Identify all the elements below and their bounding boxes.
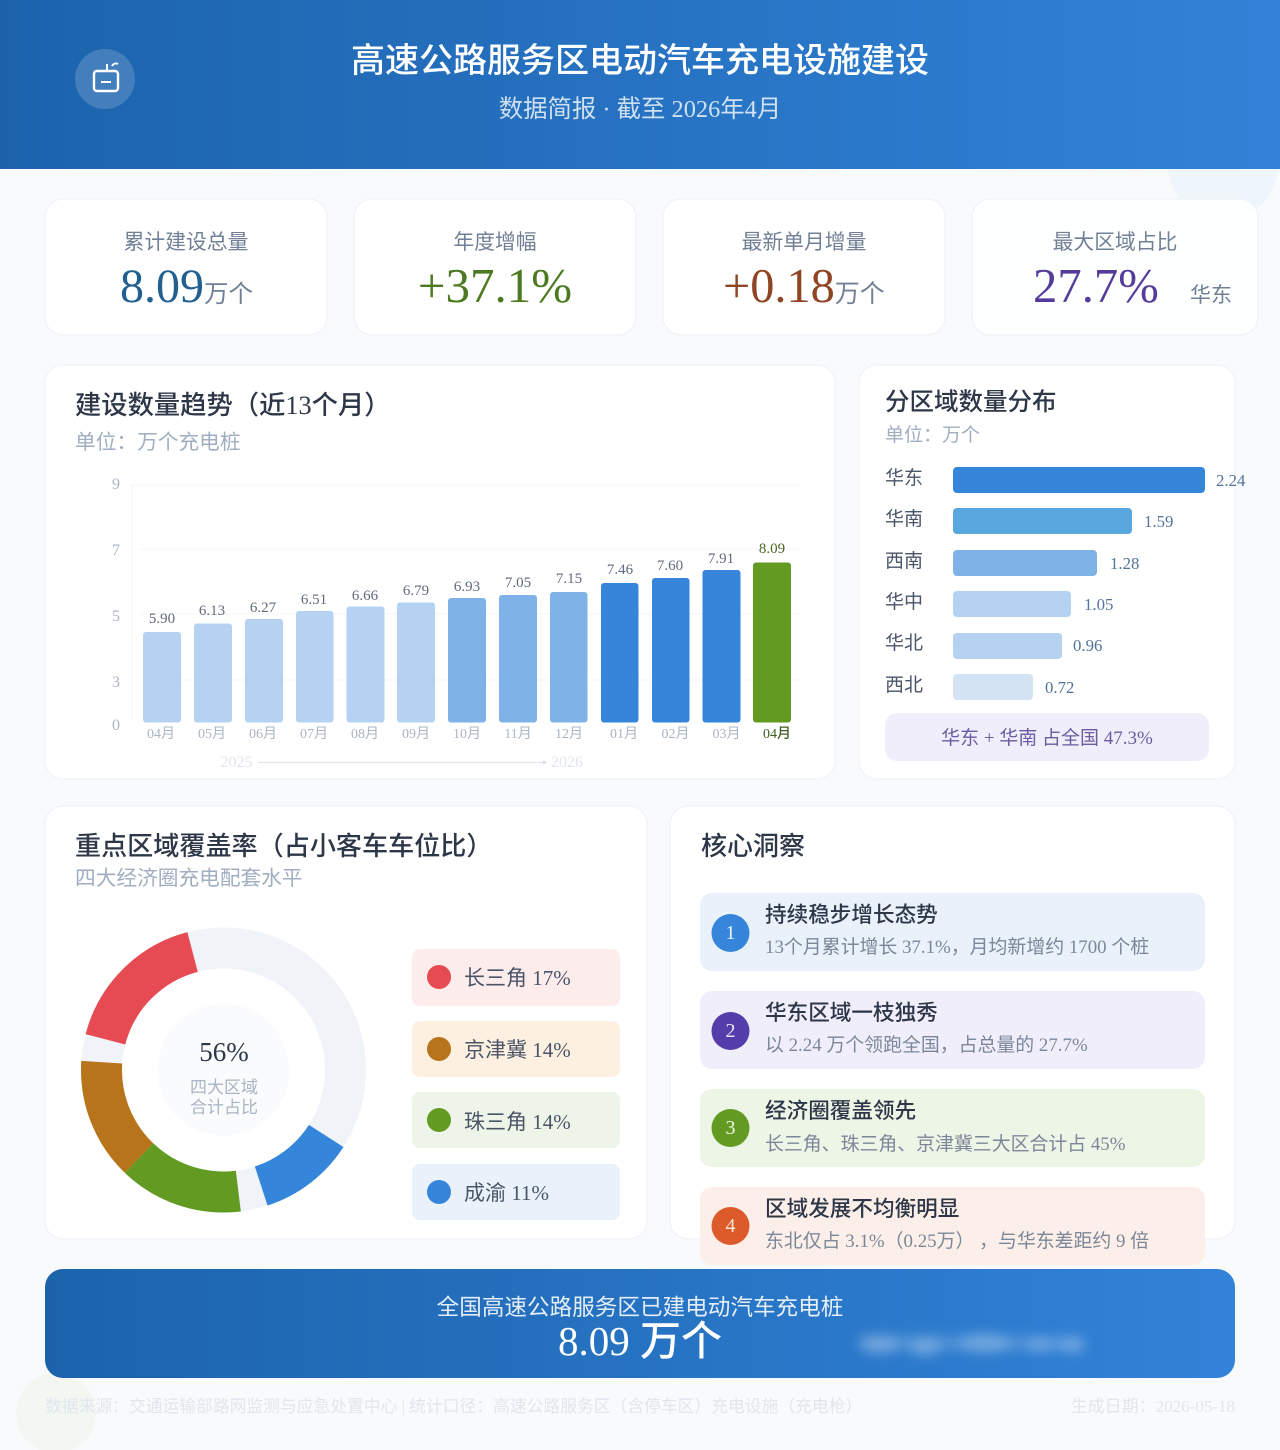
bar chart: 03月 [712, 726, 740, 742]
footer date: 生成日期：2026-05-18 [1071, 1397, 1235, 1416]
panel: construction trend [45, 365, 835, 779]
heading: insights: 核心洞察 [701, 832, 805, 861]
bar chart: 6.79 [403, 583, 429, 599]
insight 4 [700, 1187, 1205, 1265]
icon: charging station [75, 49, 135, 109]
bar chart: 7.60 [657, 558, 683, 574]
legend: Chengdu-Chongqing: 成渝 11% [464, 1181, 549, 1205]
legend: Chengdu-Chongqing [412, 1164, 620, 1220]
horizontal bar chart: 华北 [885, 632, 923, 654]
bar chart: 7.15 [556, 571, 582, 587]
horizontal bar chart: 1.59 [1144, 512, 1173, 531]
year axis: 2025 [220, 754, 252, 771]
header banner [0, 0, 1280, 169]
insight 2: 2 [726, 1020, 736, 1042]
horizontal bar chart: 西北 [885, 674, 923, 696]
KPI card: largest region: 最大区域占比 [1053, 231, 1177, 254]
KPI card: largest region [972, 199, 1258, 335]
KPI card: largest region: 27.7% [1033, 259, 1159, 313]
panel: regional distribution [859, 365, 1246, 779]
bar chart [112, 476, 800, 771]
heading: coverage: 重点区域覆盖率（占小客车车位比） [75, 832, 492, 861]
legend: Beijing-Tianjin-Hebei: 京津冀 14% [464, 1038, 571, 1062]
legend: Beijing-Tianjin-Hebei [412, 1021, 620, 1077]
bar chart: 08月 [351, 726, 379, 742]
insight 4: 4 [726, 1215, 736, 1237]
callout: share: 华东 + 华南 占全国 47.3% [941, 727, 1153, 749]
horizontal bar chart: 2.24 [1216, 471, 1246, 490]
KPI card: annual growth: +37.1% [418, 258, 572, 313]
KPI card: annual growth [354, 199, 636, 335]
bar chart: 7.46 [607, 562, 634, 578]
horizontal bar chart: 0.72 [1045, 678, 1074, 697]
unit note: regions: 单位：万个 [885, 424, 980, 446]
horizontal bar chart: 西南 [885, 550, 923, 572]
insight 1: 1 [726, 922, 736, 944]
bar chart: 05月 [198, 726, 226, 742]
subheading: coverage: 四大经济圈充电配套水平 [75, 867, 303, 890]
bar chart: 5 [112, 608, 120, 625]
banner caption: 全国高速公路服务区已建电动汽车充电桩 [437, 1295, 843, 1320]
insight 3: 经济圈覆盖领先 [765, 1099, 916, 1123]
horizontal bar chart: 华中 [885, 591, 923, 613]
KPI card: total [45, 199, 327, 335]
legend: Yangtze delta: 长三角 17% [464, 966, 571, 990]
insight 3 [700, 1089, 1205, 1167]
year axis [220, 754, 583, 771]
KPI card: annual growth: 年度增幅 [453, 231, 537, 254]
footer source note: 数据来源：交通运输部路网监测与应急处置中心 | 统计口径：高速公路服务区（含停车区）充电设施（充电枪） [45, 1397, 862, 1416]
bar chart: 8.09 [759, 541, 785, 557]
bar chart: 12月 [555, 726, 583, 742]
bottom banner [45, 1269, 1235, 1378]
bar chart: 6.27 [250, 600, 277, 616]
subtitle: 数据简报 · 截至 2026年4月 [499, 96, 781, 123]
KPI card: largest region: 华东 [1190, 283, 1232, 307]
horizontal bar chart: 1.28 [1110, 554, 1139, 573]
horizontal bar chart: 华南 [885, 508, 923, 530]
panel: coverage [45, 806, 647, 1239]
heading: regions: 分区域数量分布 [885, 388, 1056, 416]
donut chart [102, 948, 346, 1192]
bar chart: 10月 [453, 726, 481, 742]
bar chart: 04月 [147, 726, 175, 742]
insight 3: 3 [726, 1117, 736, 1139]
bar chart: 7.05 [505, 575, 531, 591]
legend: Pearl delta: 珠三角 14% [464, 1110, 571, 1134]
donut center value: 56% [199, 1037, 249, 1067]
KPI card: total: 累计建设总量 [124, 231, 248, 254]
bar chart: 01月 [610, 726, 638, 742]
insight 1: 13个月累计增长 37.1%，月均新增约 1700 个桩 [765, 936, 1149, 958]
legend: Yangtze delta [412, 949, 620, 1006]
year axis: 2026 [551, 754, 583, 771]
bar chart: 09月 [402, 726, 430, 742]
insight 2: 以 2.24 万个领跑全国，占总量的 27.7% [765, 1034, 1088, 1056]
insight 4: 区域发展不均衡明显 [765, 1197, 959, 1221]
KPI card: monthly increase [663, 199, 945, 335]
banner value: 8.09 万个 [558, 1318, 722, 1364]
bar chart: 3 [112, 674, 120, 691]
callout: share [885, 713, 1209, 761]
insight 1 [700, 893, 1205, 971]
insight 2: 华东区域一枝独秀 [765, 1001, 938, 1025]
bar chart: 11月 [504, 726, 532, 742]
bar chart: 6.93 [454, 579, 480, 595]
KPI card: monthly increase: 最新单月增量 [742, 231, 866, 254]
bar chart: 06月 [249, 726, 277, 742]
insight 4: 东北仅占 3.1%（0.25万） ，与华东差距约 9 倍 [765, 1230, 1149, 1252]
bar chart: 6.51 [301, 592, 327, 608]
bar chart: 7 [112, 542, 120, 559]
donut center value: 四大区域 [190, 1078, 258, 1097]
bar chart: 7.91 [708, 551, 734, 567]
heading: trend: 建设数量趋势（近13个月） [75, 391, 391, 420]
horizontal bar chart: 华东 [885, 467, 923, 489]
insight 1: 持续稳步增长态势 [765, 903, 938, 927]
unit note: trend: 单位：万个充电桩 [75, 431, 241, 454]
donut center value: 合计占比 [190, 1098, 258, 1117]
bar chart: 9 [112, 476, 120, 493]
bar chart: 6.13 [199, 603, 225, 619]
bar chart: 0 [112, 717, 120, 734]
bar chart: 02月 [662, 726, 690, 742]
legend: Pearl delta [412, 1092, 620, 1148]
panel: core insights [670, 806, 1235, 1265]
bar chart: 5.90 [149, 611, 175, 627]
horizontal bar chart: 1.05 [1084, 595, 1113, 614]
horizontal bar chart [885, 467, 1246, 700]
bar chart: 07月 [300, 726, 328, 742]
donut center value [190, 1037, 258, 1117]
title: 高速公路服务区电动汽车充电设施建设 [351, 42, 929, 80]
insight 2 [700, 991, 1205, 1069]
insight 3: 长三角、珠三角、京津冀三大区合计占 45% [765, 1133, 1126, 1155]
KPI card: total: 8.09万个 [120, 260, 253, 313]
horizontal bar chart: 0.96 [1073, 636, 1102, 655]
bar chart: 04月 [763, 726, 791, 742]
KPI card: monthly increase: +0.18万个 [723, 260, 885, 313]
bar chart: 6.66 [352, 588, 379, 604]
